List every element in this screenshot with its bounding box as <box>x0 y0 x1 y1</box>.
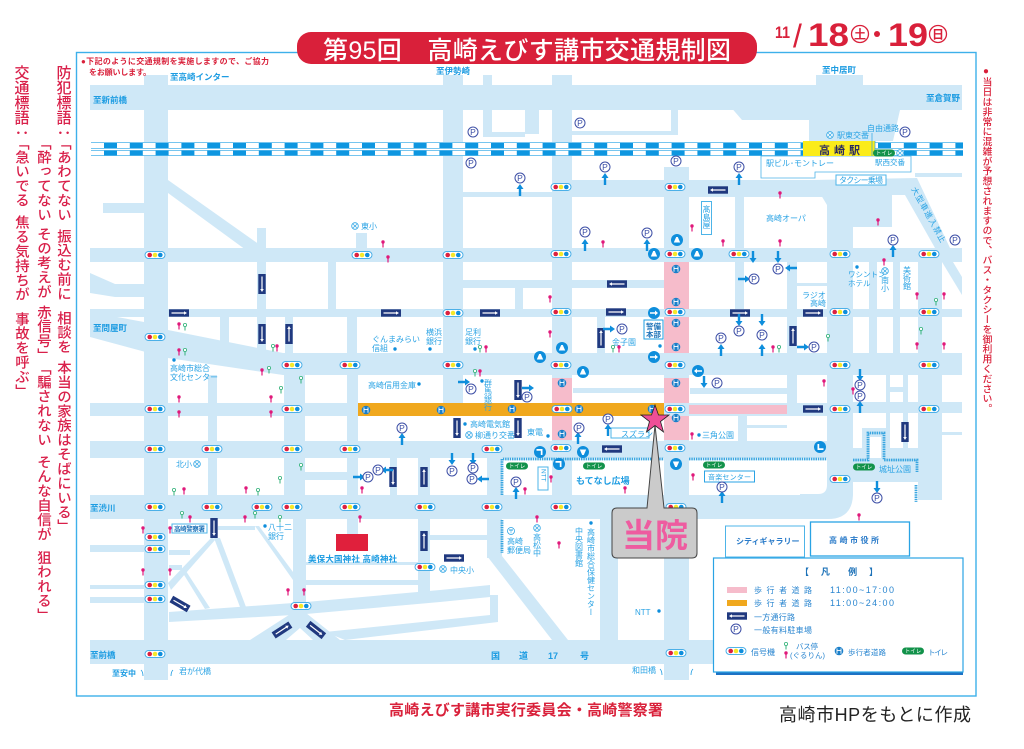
legend orange text: 歩行者道路 <box>754 598 812 608</box>
direction signs: blue circles <box>534 234 826 470</box>
parking markers: P <box>619 324 625 334</box>
road destination labels: 号 <box>580 651 589 661</box>
place labels: ぐんまみらい <box>372 335 420 344</box>
parking markers: P <box>513 477 519 487</box>
slogan column 3: 焦る気持ちが <box>13 215 29 302</box>
parking markers: P <box>470 463 476 473</box>
place labels: 足利 <box>465 327 481 337</box>
star marker <box>641 405 669 432</box>
place labels: 横浜 <box>426 327 442 337</box>
place labels: 高崎市総合 <box>170 363 210 373</box>
place labels: 高崎 <box>507 536 523 546</box>
parking markers: P <box>775 264 781 274</box>
legend panel <box>714 558 963 675</box>
road destination labels: 至伊勢崎 <box>436 66 471 76</box>
parking markers: P <box>399 423 405 433</box>
parking markers: P <box>874 493 880 503</box>
slogan column 3: 交通標語： <box>12 65 30 140</box>
legend bus stop text: バス停 <box>796 641 818 651</box>
event date: 11 <box>775 23 790 42</box>
Music center box <box>704 471 754 482</box>
road destination labels: 17 <box>548 651 558 661</box>
station labels: タクシー乗場 <box>839 175 883 185</box>
toilets: トイレ <box>706 463 722 469</box>
parking markers: P <box>605 414 611 424</box>
parking markers: P <box>524 392 530 402</box>
shrine block <box>336 534 368 551</box>
legend parking text: 一般有料駐車場 <box>754 625 812 635</box>
parking markers: P <box>890 235 896 245</box>
slogan column 1: 本当の家族は <box>55 360 71 447</box>
slogan column 3: 急いでる <box>13 149 29 208</box>
road destination labels: 至渋川 <box>90 503 116 513</box>
notice at top left of map: ●下記のように交通規制を実施しますので、ご協力 <box>81 56 269 66</box>
slogan column 2: 「 <box>35 136 51 151</box>
slogan column 1: 相談を <box>55 311 71 354</box>
parking markers: P <box>673 156 679 166</box>
toilets: トイレ <box>856 465 872 471</box>
Music center label: 音楽センター <box>708 472 751 482</box>
pedestrian road: orange 11:00-24:00 <box>358 403 664 416</box>
place labels: 中央小 <box>450 565 474 575</box>
city gallery label: シティギャラリー <box>736 537 800 546</box>
place labels: もてなし広場 <box>576 475 630 486</box>
road destination labels: 至安中 <box>112 668 136 678</box>
legend toilet icon: トイレ <box>905 649 921 655</box>
place labels: 〒 <box>508 528 514 536</box>
police station label: 高崎警察署 <box>174 524 206 533</box>
Keibi honbu label: 警備 <box>646 321 662 331</box>
legend pedestrian text: 歩行者道路 <box>848 647 886 657</box>
parking markers: P <box>576 423 582 433</box>
legend pink time: 11:00~17:00 <box>830 585 894 595</box>
legend parking icon <box>731 624 741 634</box>
parking markers: P <box>577 118 583 128</box>
road destination labels: 道 <box>519 650 528 661</box>
place labels: 群馬銀行 <box>484 378 492 412</box>
parking markers: P <box>719 482 725 492</box>
railway line <box>91 142 963 156</box>
slogan column 1: そばにいる」 <box>55 447 71 533</box>
station labels: 駅東交番 <box>837 130 869 140</box>
event date: 18 <box>808 17 849 53</box>
event date: 日 <box>932 28 944 42</box>
city hall label: 高崎市役所 <box>829 535 882 545</box>
place labels: 南小 <box>880 275 890 293</box>
legend one-way text: 一方通行路 <box>754 612 795 622</box>
callout: our hospital <box>612 405 697 558</box>
legend toilet icon <box>902 648 924 655</box>
place labels: 北小 <box>176 460 192 469</box>
legend shadow <box>716 561 963 675</box>
parking markers: P <box>469 474 475 484</box>
station labels <box>766 123 905 223</box>
slogan column 3: 「 <box>13 136 29 151</box>
slogan column 2: 騙されない <box>35 375 51 447</box>
slogan column 1: あわてない <box>55 150 71 222</box>
parking markers: P <box>468 158 474 168</box>
city hall buildings <box>726 522 910 557</box>
place labels: 中央図書館 <box>574 526 584 568</box>
city hall <box>810 522 910 556</box>
place labels: 高崎市総合保健センター <box>586 527 596 616</box>
road destination labels: 至倉賀野 <box>926 93 961 103</box>
place labels: 高崎電気館 <box>470 419 510 429</box>
labelled boxes on map <box>172 202 754 533</box>
title text: 第95回 高崎えびす講市交通規制図 <box>323 37 731 65</box>
station labels: 駅西交番 <box>875 157 905 167</box>
parking markers <box>363 118 960 503</box>
road destination labels: 至前橋 <box>90 650 116 660</box>
castle park inner block <box>870 437 881 458</box>
place labels: 高松中 <box>532 532 542 558</box>
toilets: トイレ <box>509 464 525 470</box>
parking markers: P <box>470 127 476 137</box>
slogan column 2: 「 <box>35 361 51 376</box>
legend parking icon: P <box>733 624 739 634</box>
parking markers: P <box>468 384 474 394</box>
legend bus stop text 2: (ぐるりん) <box>790 651 826 660</box>
parking markers: P <box>449 466 455 476</box>
map frame <box>76 52 976 696</box>
parking markers: P <box>375 465 381 475</box>
parking markers: P <box>365 472 371 482</box>
road destination labels: 君が代橋 <box>179 666 211 676</box>
place labels: 銀行 <box>268 531 284 541</box>
place labels: 大型車進入禁止 <box>909 185 948 244</box>
right side notice: ●当日は非常に混雑が予想されますので、バス・タクシーを御利用ください。 <box>980 66 992 413</box>
place labels: 高崎 <box>810 298 826 308</box>
slogan column 2: 酔ってない <box>35 150 51 222</box>
parking markers: P <box>718 333 724 343</box>
slogan column 1: 防犯標語： <box>54 65 72 140</box>
place labels: 銀行 <box>426 336 442 346</box>
place labels: 柳通り交番 <box>475 430 515 440</box>
parking markers: P <box>751 274 757 284</box>
road destination labels: 至新前橋 <box>93 95 128 105</box>
Keibi honbu box <box>644 320 663 339</box>
parking markers: P <box>582 227 588 237</box>
legend orange time: 11:00~24:00 <box>830 598 894 608</box>
place labels: 文化センター <box>170 372 218 382</box>
place labels: ホテル <box>848 279 871 288</box>
notice at top left of map: をお願いします。 <box>89 68 151 77</box>
slogan column 2: 狙われる」 <box>35 550 51 622</box>
slogans: vertical red crime and traffic slogans <box>12 65 72 622</box>
parking markers: P <box>644 228 650 238</box>
parking markers: P <box>857 380 863 390</box>
place labels: 東小 <box>361 221 377 231</box>
slogan column 2: その考えが <box>35 227 51 299</box>
Takashimaya box <box>702 202 712 234</box>
police station <box>172 524 207 533</box>
slogan column 1: 「 <box>55 136 71 151</box>
place labels: 金子園 <box>612 337 636 347</box>
Suzuran box <box>611 428 649 438</box>
station buildings <box>761 123 911 223</box>
title banner <box>297 32 757 65</box>
notice at top left of map <box>81 56 269 77</box>
legend one-way icon <box>727 612 747 620</box>
NTT box <box>538 467 548 490</box>
Keibi honbu label line 2: 本部 <box>646 329 662 339</box>
pedestrian roads: pink 11:00-17:00 <box>552 262 787 440</box>
event date <box>775 17 946 54</box>
road destination labels: 至中居町 <box>822 65 857 75</box>
event date: 土 <box>854 26 866 42</box>
event date: / <box>793 18 802 54</box>
organizers footer: 高崎えびす講市実行委員会・高崎警察署 <box>389 701 663 719</box>
place labels: ワシントン <box>848 270 886 279</box>
callout text: 当院 <box>622 517 688 554</box>
place labels: 郵便局 <box>507 545 531 555</box>
slogan column 2: そんな自信が <box>35 455 51 542</box>
toilets <box>506 150 895 471</box>
parking markers: P <box>902 127 908 137</box>
place labels: ラジオ <box>802 291 826 300</box>
parking markers: P <box>517 173 523 183</box>
NTT label: NTT <box>540 469 546 482</box>
parking markers: P <box>811 342 817 352</box>
place labels: NTT <box>635 608 651 617</box>
parking markers: P <box>759 330 765 340</box>
toilets: トイレ <box>876 151 892 157</box>
place labels: 東電 <box>527 427 543 437</box>
title pill <box>297 32 757 64</box>
station labels: 高崎オーパ <box>766 213 806 223</box>
Suzuran label: スズラン <box>621 429 653 439</box>
legend pedestrian icon <box>835 647 843 655</box>
pedestrian road markers <box>362 265 680 438</box>
callout bubble <box>612 425 697 558</box>
road destination labels <box>90 65 961 678</box>
legend toilet text: トイレ <box>928 648 948 657</box>
legend bus stop icons <box>784 642 788 658</box>
legend pink text: 歩行者道路 <box>754 585 812 595</box>
place labels: 三角公園 <box>702 430 734 440</box>
parking arrows <box>353 173 896 503</box>
taxi stand label box <box>836 175 886 185</box>
road destination labels: 至高崎インター <box>170 72 230 82</box>
Takasaki station name: 高崎駅 <box>819 143 864 157</box>
slogan column 3: 事故を呼ぶ」 <box>13 312 29 398</box>
place labels: 城址公園 <box>879 464 911 474</box>
place labels: 高崎信用金庫 <box>368 380 416 390</box>
legend traffic light text: 信号機 <box>751 647 775 657</box>
road destination labels: 至問屋町 <box>93 323 128 333</box>
shrine <box>308 534 397 564</box>
parking markers: P <box>736 162 742 172</box>
traffic lights <box>145 184 939 657</box>
source credit: 高崎市HPをもとに作成 <box>779 705 971 725</box>
bus stops <box>141 191 946 596</box>
parking markers: P <box>952 235 958 245</box>
Takashimaya label: 髙島屋 <box>702 204 711 230</box>
station labels: 駅ビル･モントレー <box>766 159 834 168</box>
road destination labels: 和田橋 <box>632 665 656 675</box>
slogan column 1: 振込む前に <box>55 229 71 301</box>
parking markers: P <box>602 162 608 172</box>
Takasaki station <box>803 141 875 156</box>
event date: 19 <box>888 17 928 53</box>
station outline below the tracks <box>761 156 911 178</box>
place labels: 八十二 <box>268 522 292 532</box>
place labels: 美術館 <box>902 265 912 291</box>
parking markers: P <box>857 391 863 401</box>
road destination labels: 国 <box>491 651 500 661</box>
place labels: 信組 <box>372 343 388 353</box>
wall lines around plaza and park <box>502 433 917 553</box>
toilets: トイレ <box>586 464 602 470</box>
parking markers: P <box>714 378 720 388</box>
legend orange swatch <box>727 600 747 606</box>
city gallery <box>726 526 804 557</box>
slogan column 2: 赤信号」 <box>35 305 51 363</box>
legend pink swatch <box>727 587 747 593</box>
place labels: 銀行 <box>465 336 481 346</box>
legend box <box>714 558 963 672</box>
parking markers: P <box>736 326 742 336</box>
place labels <box>170 185 948 617</box>
road network <box>90 75 962 680</box>
station labels: 自由通路 <box>867 123 899 133</box>
legend traffic light icon <box>726 648 746 654</box>
shrine label: 美保大国神社 高崎神社 <box>308 554 397 564</box>
legend title: 【 凡 例 】 <box>800 566 878 577</box>
one-way street signs <box>169 186 909 639</box>
